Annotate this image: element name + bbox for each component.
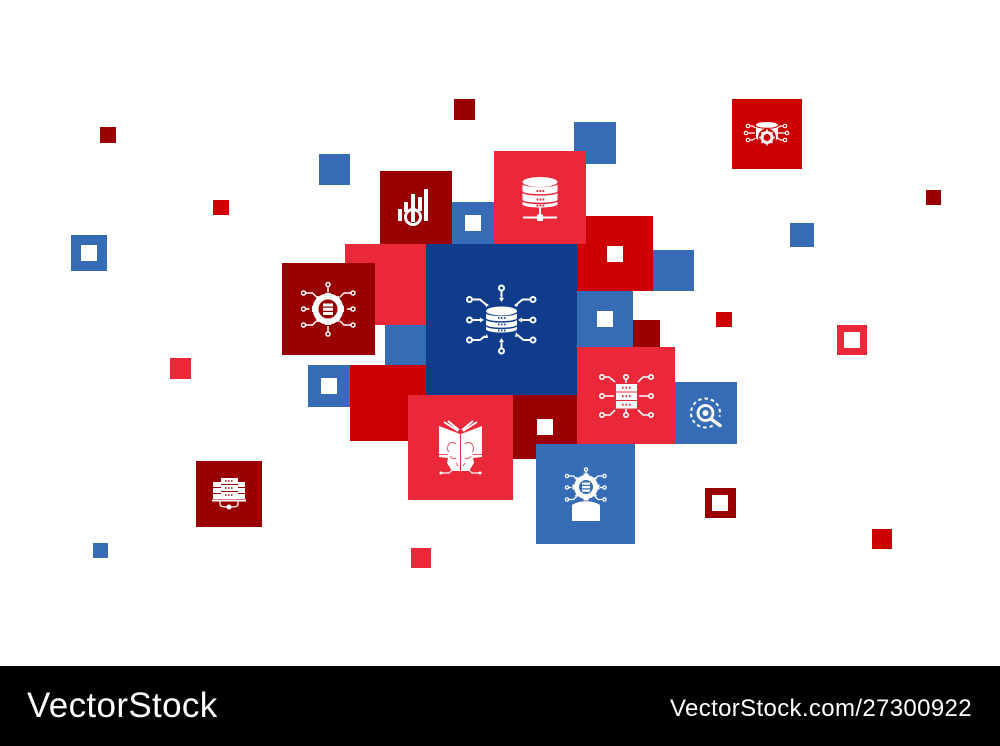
background tile: small dark red right (633, 320, 660, 347)
panel: bar chart tile (380, 171, 452, 244)
panel: database network tile (494, 151, 586, 244)
tile: small blue top with white square (452, 202, 494, 244)
hollow square: dark red lower right (705, 488, 736, 518)
panel: gear and person tile (536, 444, 635, 544)
panel: data center tile (196, 461, 262, 527)
hollow square: blue left (71, 235, 107, 271)
icon: magnifier with dashed ring (691, 399, 720, 428)
icon: open book with brain (439, 421, 482, 474)
scattered squares (93, 99, 941, 568)
icon: central database with circuits (467, 286, 536, 354)
icon: server racks on network (212, 478, 246, 510)
icon: database with gear and circuits (744, 122, 789, 146)
footer logo text: VectorStock (27, 686, 218, 725)
panel: database gear tile (732, 99, 802, 169)
footer bar (0, 666, 1000, 746)
hollow square: red right (837, 325, 867, 355)
icon: gear with server and circuits (302, 282, 355, 336)
icon: bar chart with magnifier (398, 189, 428, 224)
icon: gear with circuits above a head shape (565, 468, 606, 521)
background tile: blue behind center (385, 325, 426, 365)
tile: bright red upper right with white square (577, 216, 653, 291)
panel: gear with server tile (282, 263, 375, 355)
tile: blue right with white square (577, 291, 633, 347)
background tile: red behind gear (345, 244, 426, 325)
background tile: blue upper right (653, 250, 694, 291)
panel: open book brain tile (408, 395, 513, 500)
icon: database network (522, 177, 558, 221)
footer image id text: VectorStock.com/27300922 (670, 695, 972, 722)
panel: central data hub tile (426, 244, 577, 395)
background tile: bright red lower left (350, 365, 426, 441)
tile: small blue left with white square (308, 365, 350, 407)
panel: search tile (675, 382, 737, 444)
tile: dark red lower with white square (513, 395, 577, 459)
panel: server circuit tile (577, 347, 675, 444)
icon: server rack with circuits (600, 375, 653, 417)
